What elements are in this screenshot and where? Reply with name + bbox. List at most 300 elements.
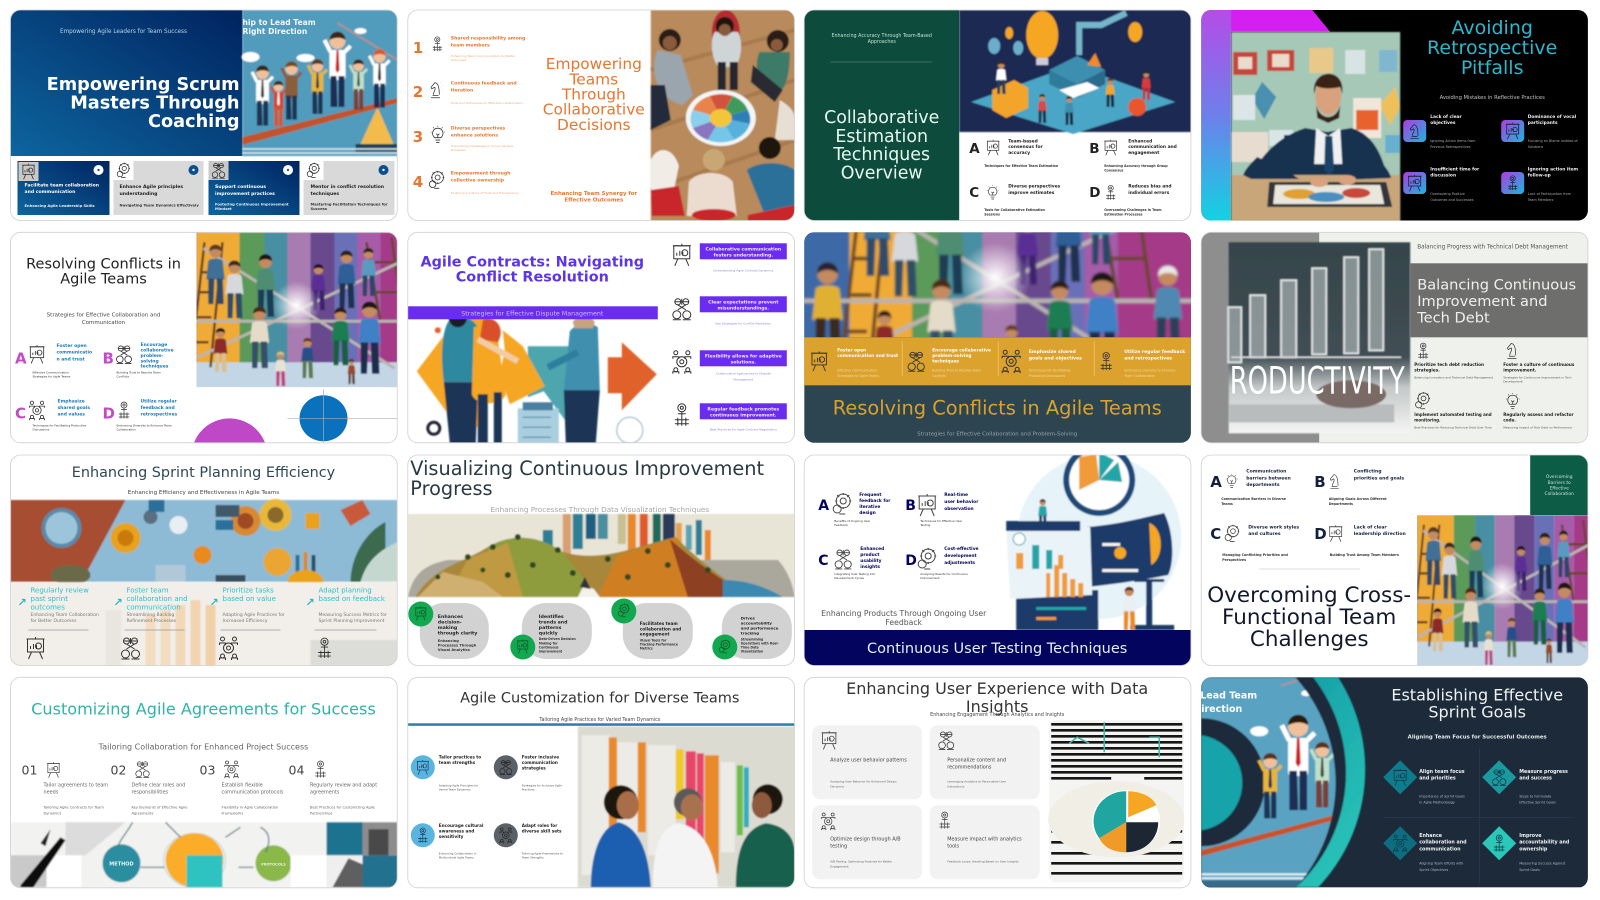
- item 1: Balancing Innovation and Technical Debt Management: [1414, 375, 1494, 379]
- step 02: Key Elements of Effective Agile: [132, 805, 188, 809]
- panel: Customizing Agile Agreements: [10, 677, 398, 888]
- panel: Resolving Conflicts in Agile Teams (list): [10, 232, 398, 444]
- feature card 1: Enhancing Agile Leadership Skills: [24, 204, 95, 208]
- item 4: Regularly assess and refactor: [1503, 412, 1574, 417]
- pill 2: patterns: [539, 625, 562, 631]
- item 4: Measuring Impact of Tech Debt on Performance: [1503, 425, 1572, 429]
- item A: barriers between: [1246, 476, 1291, 482]
- item B: Enhancing Accuracy through Group: [1104, 164, 1168, 168]
- item B: Building Trust to Resolve Team: [116, 370, 161, 374]
- item D: individual errors: [1128, 190, 1170, 196]
- subtitle: Enhancing Engagement Through Analytics and Insights: [930, 712, 1065, 718]
- goal 3: collaboration and: [1419, 839, 1467, 845]
- step 4: ↗: [306, 596, 315, 609]
- step 03: Frameworks: [222, 811, 243, 815]
- title: Through: [561, 86, 626, 104]
- item 3: Enhancing Collaboration in: [439, 851, 477, 855]
- item A: consensus for: [1008, 144, 1043, 150]
- step 02: responsibilities: [132, 789, 169, 795]
- item 3: Overlooking Positive: [1430, 192, 1465, 196]
- item A: n and trust: [56, 356, 86, 362]
- photo: team circle with wheel: [651, 10, 795, 221]
- item 1: [411, 754, 481, 791]
- item C: [15, 398, 90, 431]
- item C: Emphasize: [58, 398, 85, 404]
- item 1: Collaborative communication: [705, 246, 781, 252]
- item 1: [673, 243, 787, 272]
- feature card 4: Success: [310, 207, 328, 211]
- item D: Embracing Diversity to Enhance Team: [116, 423, 172, 427]
- pill 1: making: [438, 625, 457, 631]
- step 3: Adapting Agile Practices for: [222, 612, 285, 618]
- photo: team at kanban wall: [578, 726, 795, 887]
- goal 1: [1383, 760, 1465, 804]
- pill 1: through clarity: [438, 630, 477, 636]
- title: Enhancing User Experience with Data: [846, 679, 1148, 698]
- item C: Techniques for Facilitating Productive: [32, 423, 86, 427]
- item C: C: [15, 404, 26, 422]
- item 2: Strategies for Continuous Improvement in Tech: [1503, 375, 1572, 379]
- decorative circles: [194, 389, 398, 443]
- subtitle: Enhancing Accuracy Through Team-Based: [831, 33, 932, 39]
- feature 3: Productive Discussions: [1029, 374, 1065, 378]
- step 4: based on feedback: [318, 595, 386, 603]
- list item 2: [413, 80, 523, 105]
- pill 3: Visual Tools for: [640, 638, 667, 642]
- item B: Encourage: [140, 342, 167, 348]
- goal 4: [1482, 826, 1570, 872]
- step 03: 03: [200, 762, 215, 777]
- item C: improve estimates: [1008, 190, 1055, 196]
- list item 1: 1: [413, 39, 423, 57]
- feature 4: Embracing Diversity to Enhance: [1124, 368, 1175, 372]
- title: Retrospective: [1427, 37, 1557, 59]
- pill 2: Continuous: [539, 646, 559, 650]
- feature card 4: Mastering Facilitation Techniques for: [310, 202, 388, 206]
- item B: user behavior: [944, 499, 979, 505]
- item 4: [675, 403, 787, 431]
- title band: Improvement and: [1417, 293, 1547, 310]
- item 3: Encourage cultural: [439, 823, 484, 828]
- item A: [969, 138, 1059, 168]
- step 1: Enhancing Team Collaboration: [30, 612, 99, 618]
- step 03: [200, 761, 284, 815]
- item C: usability: [860, 558, 882, 564]
- step 1: outcomes: [30, 604, 65, 612]
- item C: and cultures: [1248, 531, 1281, 537]
- subtitle: Enhancing Team Synergy for: [550, 191, 637, 197]
- tile 1: Analyzing User Behavior for Enhanced Design: [830, 779, 897, 783]
- item B: [102, 342, 174, 378]
- tile 3: Engagement: [830, 864, 850, 868]
- title: Techniques: [832, 145, 930, 165]
- feature card 1: Facilitate team collaboration: [24, 182, 99, 188]
- item B: [905, 492, 979, 527]
- item 1: Adapting Agile Principles for: [439, 783, 479, 787]
- panel: Empowering Teams Through Collaborative Decisions: [408, 10, 795, 221]
- item B: priorities and goals: [1354, 476, 1404, 482]
- item A: Feedback: [834, 523, 848, 527]
- item 3: Management: [733, 377, 754, 381]
- item 3: sensitivity: [439, 834, 464, 839]
- item A: Foster open: [56, 343, 87, 349]
- item 4: diverse skill sets: [522, 828, 562, 833]
- corner note: Effective: [1550, 486, 1569, 492]
- item A: Communication: [1246, 468, 1286, 474]
- panel: Continuous User Testing Techniques: [804, 444, 1191, 666]
- subtitle banner: [408, 306, 658, 319]
- item A: A: [818, 498, 829, 514]
- step 04: Regularly review and adapt: [310, 782, 377, 788]
- item D: D: [102, 404, 115, 422]
- step 03: Establish flexible: [222, 782, 263, 788]
- item B: B: [1314, 473, 1326, 491]
- title: Resolving Conflicts in: [26, 256, 181, 272]
- panel: Agile Customization for Diverse Teams: [408, 677, 795, 888]
- item D: Building Trust Among Team Members: [1330, 553, 1399, 557]
- feature 3: Techniques for Facilitating: [1028, 368, 1070, 372]
- item B: B: [1089, 141, 1099, 157]
- item D: development: [944, 553, 977, 559]
- item 1: Ignoring Action Items from: [1430, 139, 1476, 143]
- item B: Real-time: [944, 492, 968, 498]
- title band: Tech Debt: [1416, 309, 1490, 326]
- item 1: Tailor practices to: [439, 754, 481, 759]
- pill 1: Enhances: [438, 614, 463, 620]
- item D: leadership direction: [1354, 531, 1406, 537]
- item 2: Key Strategies for Conflict Resolution: [715, 321, 771, 325]
- item C: C: [818, 553, 828, 569]
- item A: Communication Barriers in Diverse: [1221, 497, 1287, 501]
- subtitle: Communication: [82, 320, 126, 326]
- corner note: Barriers to: [1548, 480, 1571, 486]
- item B: Aligning Goals Across Different: [1329, 497, 1387, 501]
- feature card 3: Support continuous: [215, 184, 266, 190]
- tile 2: Leveraging Analytics to Personalize User: [947, 779, 1007, 783]
- item C: shared goals: [58, 405, 90, 411]
- title: Overview: [841, 164, 923, 184]
- title: Estimation: [835, 127, 928, 147]
- item 4: Team Members: [1527, 198, 1554, 202]
- item D: retrospectives: [140, 411, 178, 417]
- feature 3: Emphasize shared: [1029, 349, 1076, 355]
- feature card 1: and communication: [24, 189, 75, 195]
- feature card 3: Mindset: [215, 207, 232, 211]
- item 2: Focusing on Blame Instead of: [1528, 139, 1579, 143]
- item 4: follow-up: [1528, 172, 1551, 178]
- step 04: Best Practices for Customizing Agile: [310, 805, 376, 809]
- list item 3: Overcoming Challenges in Group Decision: [451, 144, 514, 148]
- item 1: team strengths: [439, 760, 476, 765]
- title: Conflict Resolution: [456, 269, 609, 285]
- tile 3: [812, 805, 922, 879]
- goal 4: Measuring Success Against: [1519, 861, 1566, 865]
- pill 2: [510, 603, 592, 660]
- item 3: [411, 823, 484, 859]
- feature 2: Building Trust to Resolve Team: [932, 368, 981, 372]
- item 1: Varied Team Dynamics: [439, 787, 471, 791]
- item B: engagement: [1128, 150, 1159, 156]
- title: Collaborative: [543, 100, 645, 118]
- subtitle: Enhancing Processes Through Data Visualization Techniques: [490, 505, 709, 514]
- item 1: Understanding Agile Contract Dynamics: [713, 268, 774, 272]
- bottom title band: Continuous User Testing Techniques: [867, 641, 1127, 657]
- step 1: ↗: [18, 596, 27, 609]
- item 1: Lack of clear: [1430, 114, 1463, 120]
- photo: mural with ladders: [196, 232, 397, 388]
- step 2: ↗: [114, 596, 123, 609]
- bottom title band: [804, 630, 1191, 666]
- item 2: communication: [522, 760, 558, 765]
- title: Pitfalls: [1461, 57, 1523, 79]
- step 02: [110, 762, 188, 815]
- pill 1: Enhancing: [438, 639, 459, 643]
- subtitle: Strategies for Effective Collaboration and Problem-Solving: [917, 431, 1077, 437]
- item 1: objectives: [1430, 120, 1456, 126]
- subtitle: Balancing Progress with Technical Debt Management: [1417, 244, 1569, 250]
- step 2: Streamlining Backlog: [126, 612, 174, 618]
- feature 1: [811, 347, 898, 378]
- item B: Consensus: [1104, 168, 1123, 172]
- list item 1: team members: [451, 42, 490, 48]
- step 01: [22, 762, 108, 815]
- tile 4: Measure impact with analytics: [947, 836, 1022, 842]
- panel: Agile Contracts: [408, 232, 795, 443]
- pill 4: Visualization: [741, 650, 763, 654]
- goal 2: and success: [1519, 775, 1552, 781]
- panel: Balancing Continuous Improvement and Tech Debt: [1201, 232, 1588, 443]
- feature 2: techniques: [932, 358, 959, 364]
- corner note: [1530, 455, 1588, 515]
- image: striped pie chart: [1048, 720, 1184, 882]
- title: Functional Team: [1222, 605, 1396, 630]
- item 3: discussion: [1430, 172, 1456, 178]
- title: Collaborative: [824, 108, 939, 128]
- tile 1: [812, 725, 922, 799]
- list item 1: [413, 36, 525, 62]
- item B: B: [102, 349, 114, 367]
- pill 4: Operations with Real-: [741, 642, 779, 646]
- list item 1: Enhancing Team Communication for Better: [451, 54, 516, 58]
- item A: [818, 492, 891, 527]
- step 2: communication: [126, 604, 181, 612]
- item B: Testing: [919, 523, 931, 527]
- panel: Collaborative Estimation Techniques: [804, 10, 1191, 221]
- item A: Strategies for Agile Teams: [32, 374, 71, 378]
- pill 2: Improvement: [539, 650, 563, 654]
- list item 1: Shared responsibility among: [451, 36, 525, 42]
- item D: Reduces bias and: [1128, 184, 1172, 190]
- item C: Managing Conflicting Priorities and: [1222, 553, 1289, 557]
- item 2: strategies: [522, 765, 546, 770]
- item 2: [1501, 114, 1579, 149]
- subtitle: Enhancing Efficiency and Effectiveness in Agile Teams: [128, 490, 279, 496]
- photo: productivity chalk bars: [1228, 242, 1410, 433]
- pill 4: and performance: [741, 626, 779, 630]
- item C: Sessions: [984, 212, 1000, 216]
- title: Teams: [568, 70, 618, 88]
- step 02: Agreements: [132, 811, 153, 815]
- item B: problem-: [140, 353, 164, 359]
- list item 4: 4: [413, 173, 423, 191]
- faded bottom panel: [10, 582, 398, 666]
- item B: observation: [944, 506, 974, 512]
- item 2: misunderstandings.: [718, 305, 769, 311]
- subtitle: Feedback: [885, 618, 923, 627]
- list item 4: Fostering a Culture of Trust and Transparency: [451, 191, 519, 195]
- item A: [15, 343, 92, 378]
- illustration: dashboard analytics: [1006, 444, 1181, 630]
- title: Empowering: [546, 55, 642, 73]
- step 01: Tailoring Agile Contracts for Team: [42, 805, 104, 809]
- item B: Departments: [1329, 502, 1353, 506]
- item A: Frequent: [859, 492, 882, 498]
- corner note: Overcoming: [1546, 474, 1573, 480]
- pill 2: Identifies: [539, 614, 564, 620]
- item 4: code.: [1503, 417, 1516, 422]
- item A: Team-based: [1008, 138, 1038, 144]
- photo: man at desk with puzzle: [1231, 32, 1400, 221]
- corner note: Collaboration: [1545, 491, 1574, 497]
- step 2: Foster team: [126, 586, 169, 594]
- item D: Analyzing Results for Continuous: [920, 572, 968, 576]
- item 2: [673, 296, 787, 325]
- item C: Discussions: [32, 427, 50, 431]
- step 1: [18, 586, 99, 659]
- item B: collaborative: [140, 347, 174, 353]
- subtitle banner: Strategies for Effective Dispute Management: [461, 310, 604, 317]
- step 2: Refinement Processes: [126, 618, 177, 624]
- title: Agile Contracts: Navigating: [420, 254, 644, 270]
- pill 2: quickly: [539, 630, 558, 636]
- item B: Techniques for Effective User: [919, 519, 963, 523]
- feature card 2: understanding: [120, 191, 157, 197]
- item B: Conflicting: [1354, 468, 1382, 474]
- tile 2: [930, 725, 1040, 799]
- title: Visualizing Continuous Improvement: [410, 457, 764, 480]
- item A: A: [969, 141, 980, 157]
- item 2: Foster a culture of continuous: [1503, 362, 1575, 367]
- title band: Balancing Continuous: [1417, 276, 1576, 293]
- step 3: [210, 586, 285, 660]
- goal 3: Sprint Objectives: [1419, 868, 1448, 872]
- item D: D: [1089, 185, 1100, 201]
- list item 4: collective ownership: [451, 178, 505, 184]
- step 04: 04: [288, 762, 304, 777]
- goal 4: Sprint Goals: [1519, 868, 1540, 872]
- subtitle: Aligning Team Focus for Successful Outcomes: [1408, 734, 1547, 740]
- item C: Development Cycles: [834, 576, 864, 580]
- item A: communicatio: [56, 349, 92, 355]
- subtitle: Effective Outcomes: [564, 198, 623, 204]
- item 4: continuous improvement.: [710, 412, 777, 418]
- step 04: [288, 761, 377, 815]
- pill 2: Making for: [539, 642, 558, 646]
- feature 1: communication and trust: [837, 353, 898, 359]
- item D: Overcoming Challenges in Team: [1104, 208, 1162, 212]
- item D: Improvement: [920, 576, 941, 580]
- illustration banner text: Lead Team: [1200, 690, 1257, 701]
- step 02: Define clear roles and: [132, 782, 185, 788]
- step 2: collaboration and: [126, 595, 188, 603]
- feature card 2: Navigating Team Dynamics Effectively: [120, 204, 199, 208]
- item A: [1210, 468, 1291, 506]
- item 1: strategies.: [1414, 367, 1440, 372]
- feature card 4: Mentor in conflict resolution: [310, 184, 384, 190]
- item A: Teams: [1221, 502, 1233, 506]
- item B: Enhanced: [1128, 138, 1152, 144]
- item B: B: [905, 498, 916, 514]
- illustration banner text: hip to Lead Team: [242, 18, 316, 27]
- list item 2: iteration: [451, 88, 473, 94]
- item 3: Outcomes and Successes: [1430, 198, 1474, 202]
- goal 4: Improve: [1519, 833, 1542, 839]
- title: Agile Teams: [60, 271, 147, 287]
- feature 3: [1002, 349, 1082, 378]
- tile 2: Interactions: [947, 784, 965, 788]
- panel: Establishing Effective Sprint Goals: [1200, 677, 1588, 887]
- feature 2: problem-solving: [932, 353, 971, 359]
- feature 4: Utilize regular feedback: [1124, 349, 1186, 355]
- item C: Integrating User Testing into: [834, 572, 875, 576]
- subtitle: Approaches: [868, 39, 896, 45]
- image: methods diagram: [10, 822, 398, 887]
- illustration: team climbing beam: [242, 10, 398, 156]
- item 3: awareness and: [439, 828, 474, 833]
- goal 1: Align team focus: [1419, 769, 1465, 775]
- illustration: isometric workshop: [959, 10, 1191, 134]
- photo: 3D landscape chart: [408, 514, 795, 597]
- goal 2: [1482, 760, 1568, 804]
- item 4: [494, 823, 563, 859]
- step 3: Prioritize tasks: [222, 586, 274, 594]
- item 1: [1414, 343, 1494, 379]
- list item 3: Diverse perspectives: [451, 126, 505, 132]
- item A: A: [1210, 473, 1222, 491]
- list item 4: [413, 170, 519, 195]
- feature card 3: [208, 161, 300, 215]
- title: Customizing Agile Agreements for Success: [31, 699, 376, 718]
- item C: insights: [860, 564, 880, 570]
- item B: communication and: [1128, 144, 1177, 150]
- item A: design: [859, 510, 876, 516]
- item B: solving: [140, 358, 159, 364]
- item 3: Implement automated testing and: [1414, 412, 1492, 417]
- item 4: Regular feedback promotes: [707, 406, 779, 412]
- step 04: Partnerships: [310, 811, 332, 815]
- title: Progress: [410, 477, 493, 500]
- step 01: Tailor agreements to team: [42, 782, 108, 788]
- item 2: improvement.: [1503, 367, 1537, 372]
- item 3: monitoring.: [1414, 417, 1441, 422]
- pill 4: [712, 603, 792, 660]
- panel: Resolving Conflicts in Agile Teams (banner): [791, 171, 1229, 443]
- step 3: based on value: [222, 595, 276, 603]
- item C: [1210, 524, 1299, 562]
- title: Avoiding: [1451, 17, 1533, 39]
- title: Challenges: [1250, 627, 1369, 652]
- title: Establishing Effective: [1391, 685, 1563, 704]
- item 1: [1403, 114, 1476, 149]
- item A: feedback for: [859, 498, 891, 504]
- item 3: Collaborative Approaches to Dispute: [716, 371, 771, 375]
- feature 1: Effective Communication: [837, 368, 877, 372]
- item A: Effective Communication: [32, 370, 69, 374]
- item D: Utilize regular: [140, 398, 177, 404]
- list item 3: Processes: [451, 148, 466, 152]
- item 2: Development: [1503, 379, 1524, 383]
- feature 1: Strategies for Agile Teams: [837, 374, 879, 378]
